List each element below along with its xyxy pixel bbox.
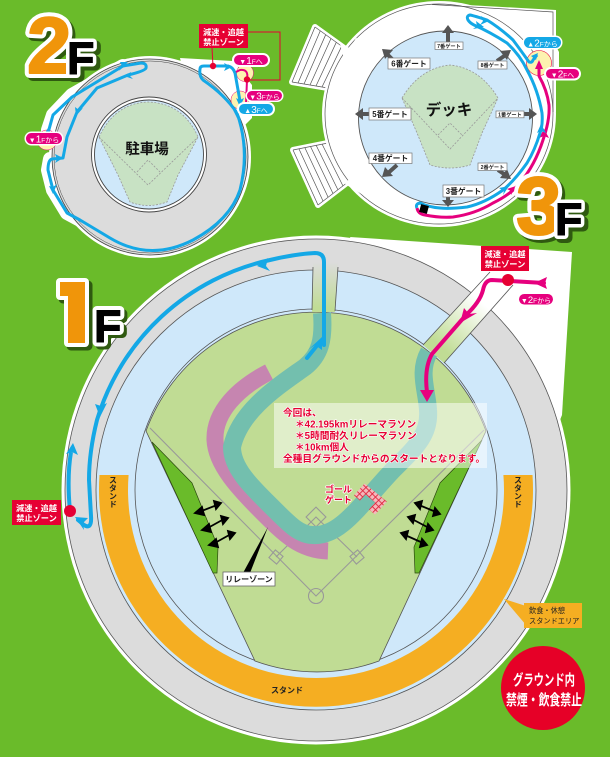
2F floor badge: 2: [30, 4, 74, 93]
stand label right: スタンド: [514, 476, 522, 508]
pill: to 1F: ▼1Fへ: [239, 56, 263, 67]
deck label: デッキ: [426, 100, 472, 119]
pill: to 2F: [546, 69, 579, 80]
notice text box: 今回は、: [283, 406, 322, 419]
notice text box: 全種目グラウンドからのスタートとなります。: [283, 452, 485, 465]
inner ring: [92, 97, 206, 212]
notice text box: ＊42.195kmリレーマラソン: [295, 418, 416, 430]
inner deck circle: [358, 31, 532, 205]
1F floor badge: [56, 278, 128, 350]
food and rest callout: 飲食・休憩: [529, 606, 565, 615]
notice: no smoking or eating on the ground: 禁煙・飲食禁止: [506, 691, 582, 709]
2F floor badge: 2: [27, 1, 72, 90]
2F floor badge: [27, 1, 98, 93]
stand label bottom: スタンド: [271, 685, 303, 695]
relay zone band: [215, 372, 328, 551]
notice text box: ＊5時間耐久リレーマラソン: [295, 429, 417, 442]
white entry apron: [350, 237, 572, 470]
baseball diamond lines: [150, 428, 484, 604]
2F floor badge: 2: [27, 1, 72, 90]
pill: to 2F: ▼2Fへ: [551, 70, 574, 80]
slow zone label left: 減速・追越: [16, 503, 58, 513]
relay zone pointer: [243, 527, 268, 573]
top entrance corridor: [312, 262, 338, 312]
3F floor badge: 3: [516, 161, 562, 252]
outer ring: [52, 59, 248, 255]
gate 4 label: 4番ゲート: [373, 153, 408, 163]
panel: 3F deck plan: [292, 1, 579, 227]
red slow zone dot right: [502, 274, 514, 286]
slow zone label: [199, 24, 248, 48]
1F floor badge: 1: [52, 266, 100, 362]
pill: from 2F: ▲2Fから: [527, 38, 558, 50]
slow zone label: 禁止ゾーン: [203, 37, 244, 47]
gate 3 label: [443, 185, 484, 197]
goal gate hatch: [357, 489, 381, 512]
3F floor badge: [516, 161, 586, 255]
black marker: [419, 204, 429, 214]
red slow zone dot left: [64, 505, 76, 517]
gate 6 label: [388, 58, 430, 69]
gate 3 label: 3番ゲート: [446, 186, 481, 196]
pill: to 3F: [239, 104, 273, 116]
3F floor badge: 3: [519, 164, 565, 255]
stand seating area: [99, 475, 533, 707]
deck white floor: [322, 1, 559, 227]
slow zone label: 減速・追越: [203, 27, 245, 37]
relay zone label: [223, 572, 275, 586]
notice text box: ＊10km個人: [295, 440, 349, 454]
yellow markers right: [231, 64, 254, 109]
gate 2 label: [478, 163, 507, 171]
yellow marker: [526, 50, 552, 76]
gate 8 label: [478, 61, 507, 69]
relay zone label: リレーゾーン: [225, 575, 273, 584]
bullpen right: [414, 440, 482, 573]
slow zone label right: [481, 246, 529, 271]
slow zone label right: 減速・追越: [485, 249, 526, 259]
magenta route: [420, 277, 547, 402]
goal gate label: ゲート: [325, 494, 352, 505]
food and rest callout: スタンドエリア: [529, 616, 579, 626]
pill: from 1F: ▼1Fから: [29, 134, 59, 146]
gate 7 label: 7番ゲート: [437, 42, 461, 50]
slow zone connector: [212, 32, 280, 80]
parking field: [99, 102, 198, 206]
field: [135, 309, 497, 672]
gate 8 label: 8番ゲート: [481, 61, 504, 69]
gate 6 label: 6番ゲート: [391, 58, 427, 68]
gate 1 label: 1番ゲート: [498, 110, 522, 118]
upper stairs: [292, 27, 347, 88]
magenta u-turn: [236, 70, 247, 104]
gate 7 label: [435, 42, 463, 50]
white halo: [48, 56, 252, 258]
yellow marker left: [37, 130, 57, 150]
blue route: [416, 15, 546, 208]
slow zone label left: 禁止ゾーン: [16, 513, 57, 523]
3F floor badge: 3: [516, 161, 562, 252]
2F floor badge: F: [70, 36, 98, 87]
blue route: [66, 253, 324, 530]
2F floor badge: F: [67, 33, 94, 84]
deck field: [402, 65, 498, 168]
1F floor badge: F: [94, 301, 122, 352]
double arrows left: [195, 501, 235, 547]
gate 1 label: [496, 110, 524, 118]
goal gate label: ゴール: [325, 484, 352, 494]
red dots: [210, 63, 250, 83]
lower stairs: [293, 143, 348, 205]
notice: no smoking or eating on the ground: グラウンド内: [513, 671, 575, 689]
3F floor badge: F: [555, 194, 582, 245]
panel: 2F plan: [26, 24, 282, 258]
pill: to 1F: [234, 55, 268, 67]
notice: no smoking or eating on the ground: [501, 646, 585, 730]
goal gate label: [325, 484, 352, 505]
pill: from 2F: ▼2Fから: [521, 295, 551, 306]
blue route: [43, 62, 244, 251]
slow zone label right: 禁止ゾーン: [485, 259, 525, 269]
gate 5 label: [369, 108, 411, 120]
slow zone label left: [12, 500, 61, 525]
1F floor badge: F: [94, 301, 122, 352]
pill: to 3F: ▲3Fへ: [244, 105, 268, 116]
magenta route: [417, 60, 549, 217]
2F floor badge: F: [67, 33, 94, 84]
3F floor badge: F: [558, 197, 586, 248]
pill: from 3F: ▼3Fから: [249, 92, 280, 102]
parking label: 駐車場: [125, 140, 169, 158]
right entrance corridor: [423, 272, 513, 363]
double arrows right: [401, 501, 440, 547]
stand label left: スタンド: [108, 476, 118, 508]
gate 2 label: 2番ゲート: [481, 163, 504, 171]
gate 5 label: 5番ゲート: [372, 109, 408, 119]
1F floor badge: F: [97, 304, 124, 355]
outer concourse ring: [62, 236, 570, 744]
course band: [232, 313, 429, 535]
food and rest callout: [504, 599, 582, 628]
gate arrows: [355, 25, 537, 207]
3F floor badge: F: [555, 194, 582, 245]
bullpen left: [152, 442, 218, 573]
panel: 1F stadium plan: [12, 236, 582, 744]
notice text box: [274, 403, 487, 468]
